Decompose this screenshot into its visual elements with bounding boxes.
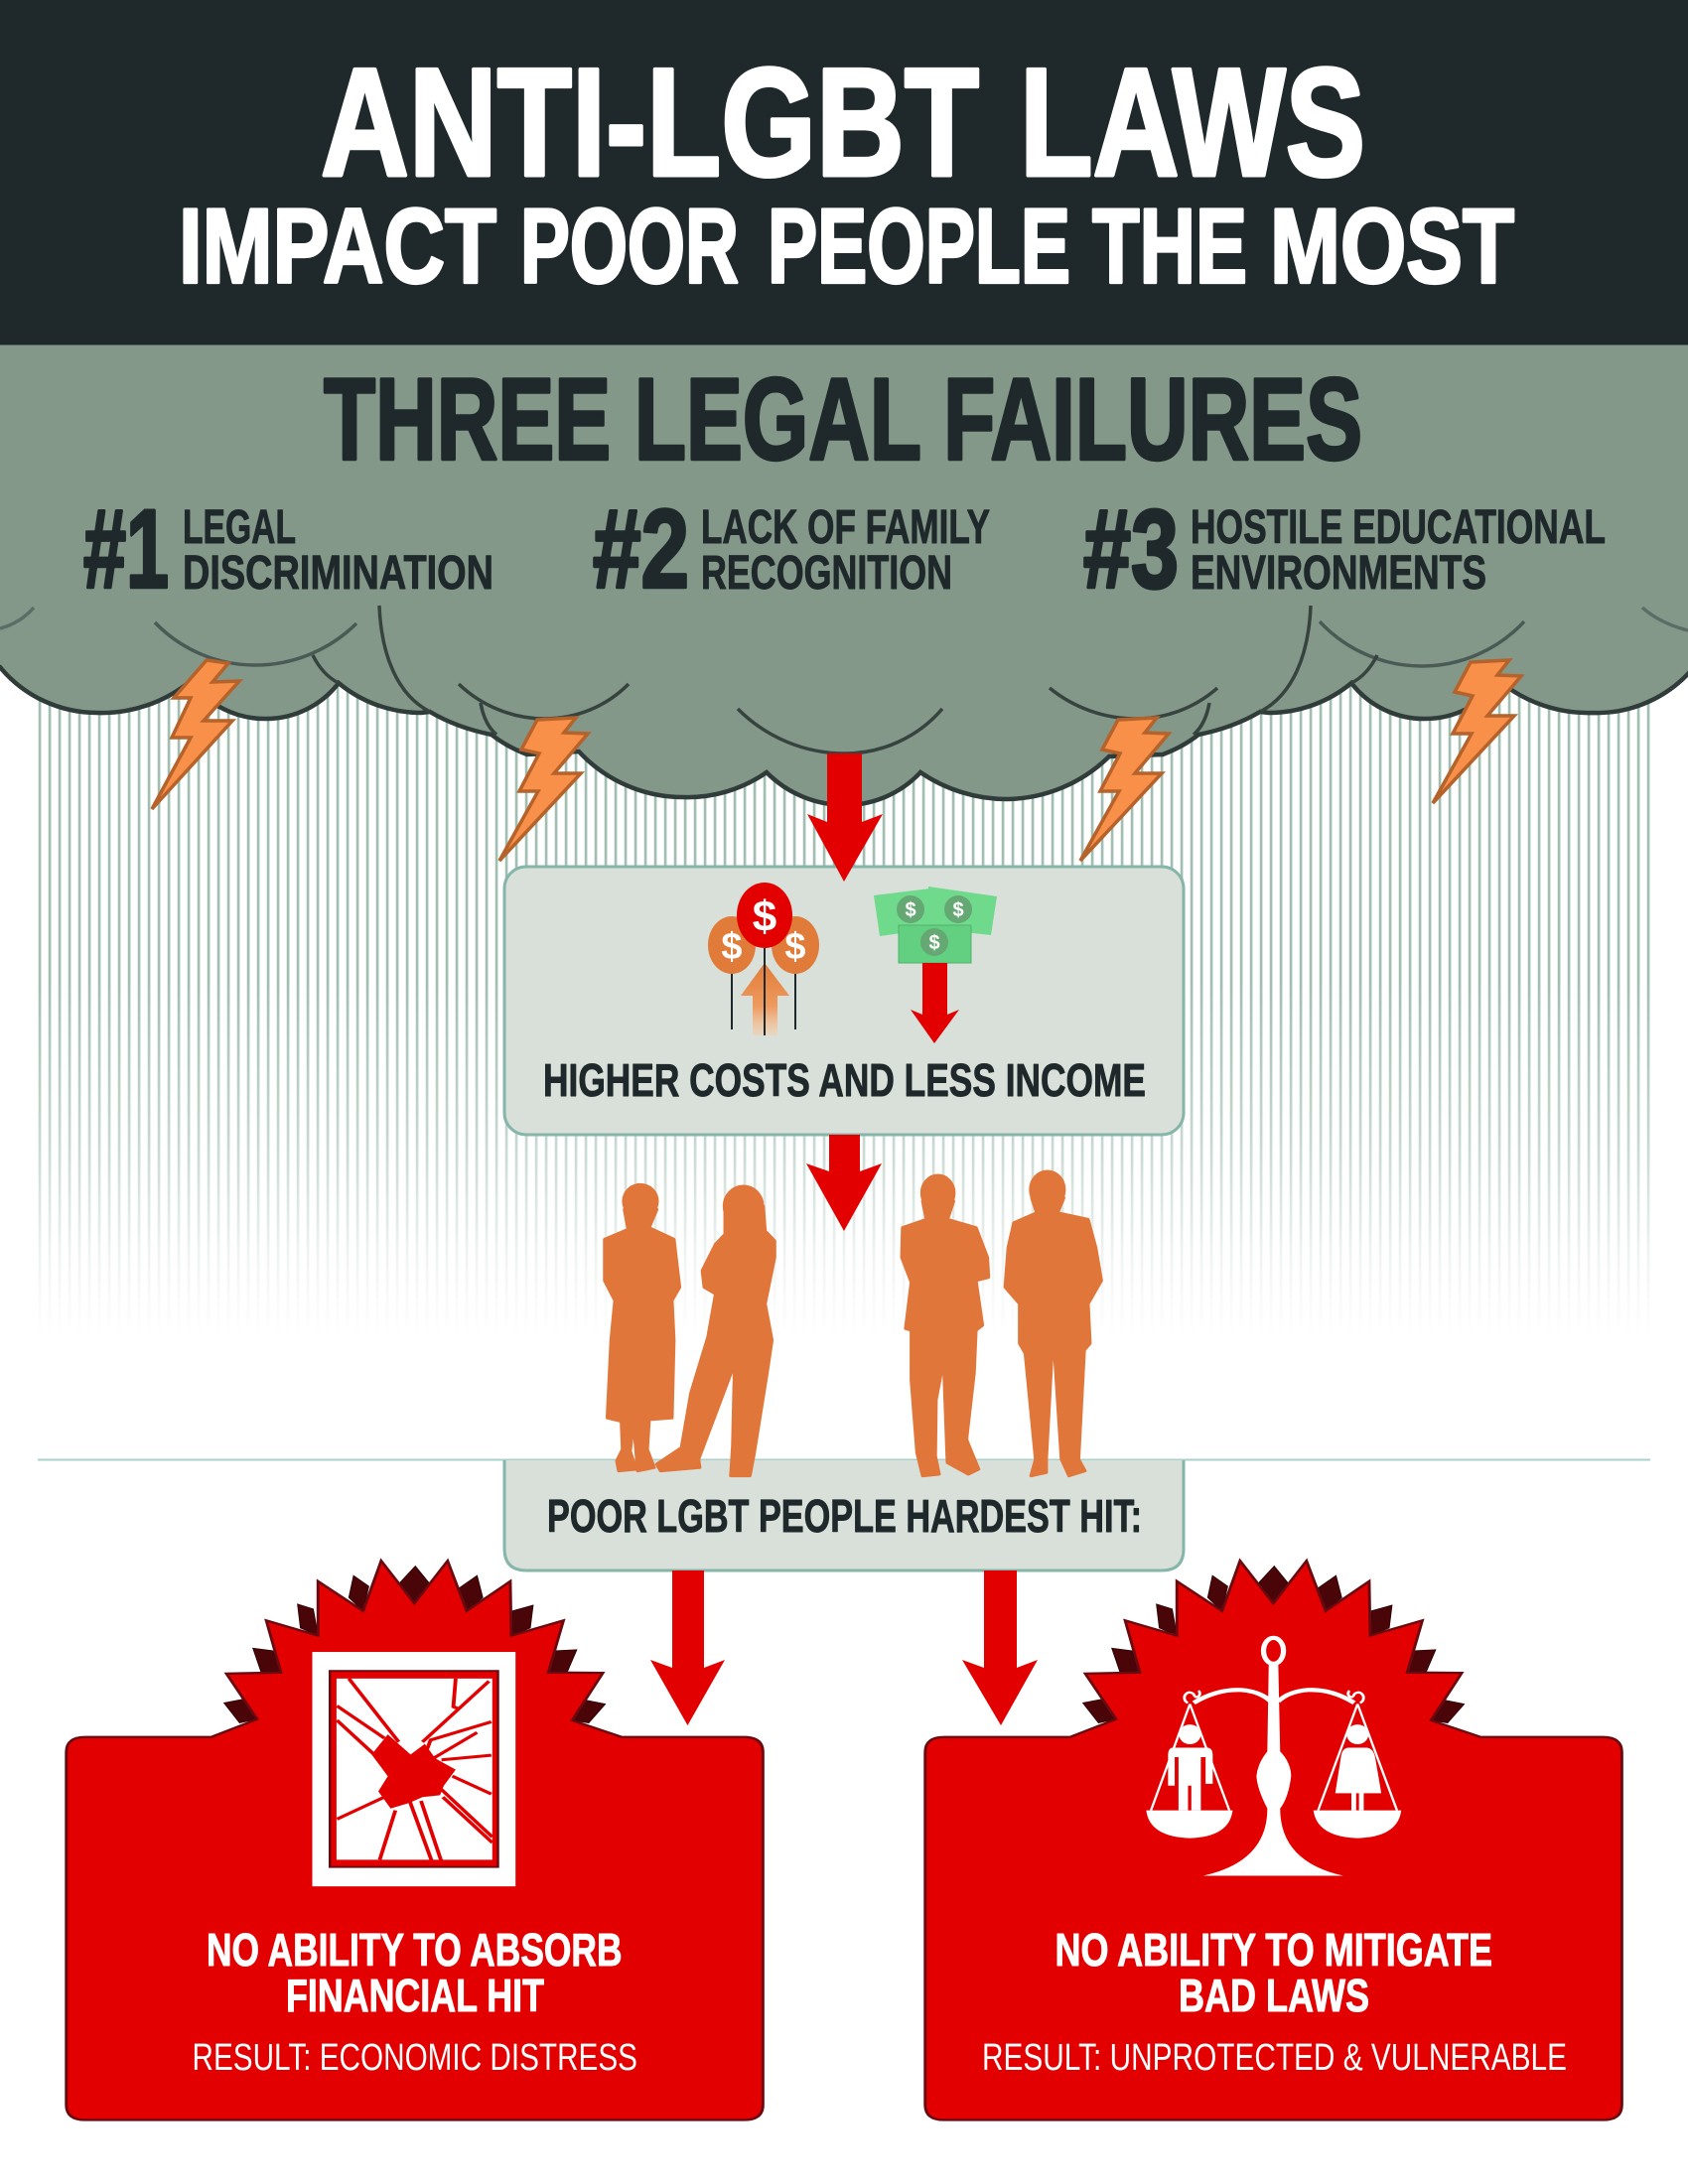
arrow: cloud to costs panel: [807, 753, 883, 882]
icon: falling income banknotes: $: [905, 899, 916, 921]
icon: falling income banknotes: [874, 887, 997, 1043]
lightning bolt 4: [1433, 660, 1521, 803]
title line 2: [179, 187, 1514, 306]
heading line 2: BAD LAWS: [1179, 1970, 1369, 2021]
failure 1: DISCRIMINATION: [183, 547, 493, 600]
title line 2: POOR: [520, 187, 739, 306]
failure 3: ENVIRONMENTS: [1191, 547, 1486, 600]
title line 2: IMPACT: [179, 187, 496, 306]
icon: falling income banknotes: $: [928, 932, 940, 954]
failure 3: [1083, 486, 1606, 612]
failure 3: #3: [1083, 486, 1179, 612]
lightning bolt 2: [499, 718, 588, 861]
woman figure: [1336, 1724, 1381, 1811]
icon: rising cost balloons: $: [753, 892, 776, 941]
burst card shape: [925, 1561, 1621, 2120]
rain background: [38, 686, 1650, 1298]
man figure: [1168, 1724, 1212, 1811]
panel label: POOR LGBT PEOPLE HARDEST HIT:: [547, 1490, 1142, 1542]
lightning bolt 3: [1080, 718, 1169, 861]
panel: no ability to mitigate: [925, 1561, 1621, 2120]
person 4: man in jacket: [1005, 1171, 1101, 1476]
failure 2: LACK OF FAMILY: [701, 501, 990, 554]
title line 1: LAWS: [1020, 36, 1365, 208]
person 1: woman in skirt: [605, 1184, 679, 1471]
person 2: woman leaning: [656, 1186, 774, 1476]
burst card shape: [67, 1561, 763, 2120]
title line 1: ANTI-LGBT: [321, 36, 979, 208]
failure 1: [83, 486, 493, 612]
arrow: to left result: [650, 1570, 725, 1725]
person 3: man arms crossed: [902, 1175, 989, 1476]
panel: poor lgbt people hardest hit: [504, 1460, 1184, 1570]
panel: no ability to absorb: [67, 1561, 763, 2120]
people silhouettes: [605, 1171, 1101, 1476]
panel label: HIGHER COSTS AND LESS INCOME: [543, 1054, 1146, 1106]
icon: rising cost balloons: [708, 883, 819, 1035]
heading line 2: FINANCIAL HIT: [286, 1970, 544, 2021]
arrow: to right result: [962, 1570, 1038, 1725]
title line 2: PEOPLE: [768, 187, 1070, 306]
icon: falling income banknotes: $: [952, 899, 964, 921]
failure 2: RECOGNITION: [701, 547, 952, 600]
panel: higher costs and less income: [504, 867, 1184, 1135]
storm cloud: [0, 338, 1688, 805]
title line 2: MOST: [1270, 187, 1514, 306]
failure 2: [593, 486, 990, 612]
title line 2: THE: [1092, 187, 1247, 306]
icon: rising cost balloons: $: [784, 926, 806, 968]
icon: shattered window: [312, 1652, 515, 1886]
failure 1: LEGAL: [183, 501, 296, 554]
failure 2: #2: [593, 486, 689, 612]
icon: rising cost balloons: $: [721, 926, 743, 968]
icon: scales of justice with man and woman: [1146, 1638, 1401, 1875]
lightning bolt 1: [152, 660, 239, 809]
result text: RESULT: ECONOMIC DISTRESS: [193, 2037, 637, 2079]
failure 1: #1: [83, 486, 169, 612]
arrow: costs panel to people: [806, 1135, 882, 1231]
heading: NO ABILITY TO MITIGATE: [1055, 1924, 1492, 1976]
header band: [0, 0, 1688, 345]
heading: NO ABILITY TO ABSORB: [207, 1924, 622, 1976]
ground line: [38, 1459, 1650, 1461]
